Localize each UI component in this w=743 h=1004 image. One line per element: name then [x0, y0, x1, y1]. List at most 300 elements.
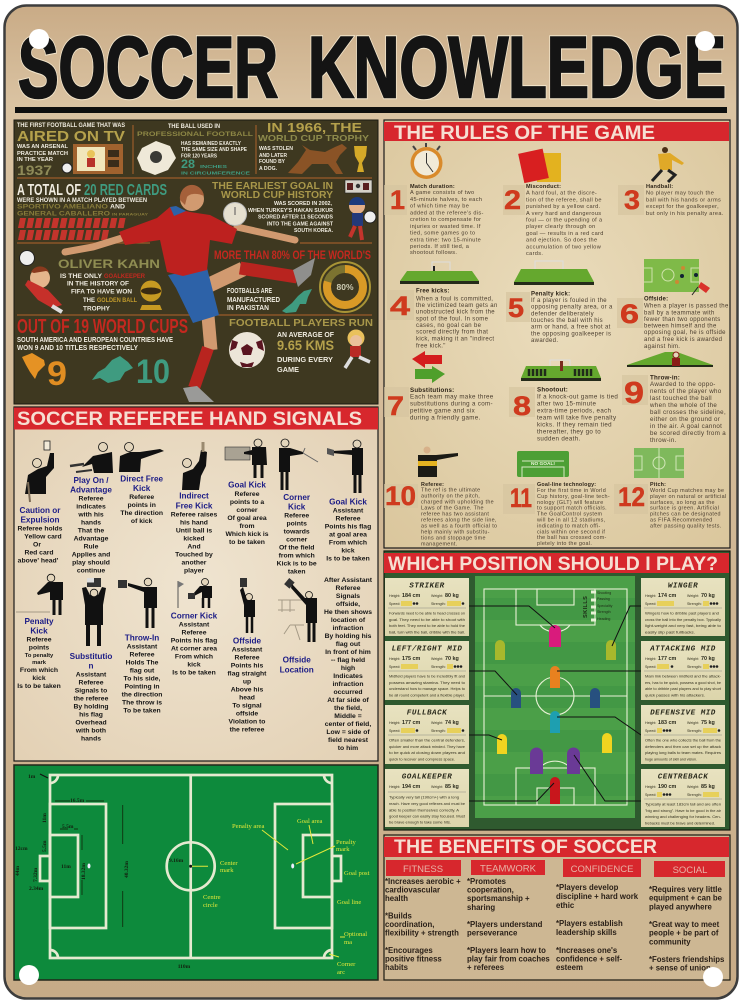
rule 9: throw-in: Awarded to the oppo- [650, 381, 716, 388]
rule 9: throw-in: throw-in. [650, 437, 677, 444]
signal: penalty kick: To penalty [25, 653, 54, 659]
rule 9: throw-in: in the air. A goal cannot [650, 423, 722, 430]
column: social: equipment + can be [649, 894, 723, 903]
fact: players run: AN AVERAGE OF [277, 330, 334, 339]
card: striker: STRIKER [409, 582, 445, 590]
fact: 1966 trophy: IN 1966, THE [267, 120, 362, 135]
rule 7: substitutions [387, 351, 494, 422]
card: fullback: Height: [389, 721, 400, 725]
rule 1: match duration: extra time: two 15-minute [410, 237, 481, 243]
signal: substitution: with both [75, 727, 106, 734]
fact: players run: FOOTBALL PLAYERS RUN [229, 317, 373, 329]
signal: direct free kick [119, 442, 164, 525]
card: fullback: Speed: [389, 729, 400, 733]
signal: assistant goal kick: Points his flag [325, 523, 371, 530]
card: winger: cross the ball into the penalty box. Typically [645, 618, 721, 622]
signal: assistant corner kick [171, 578, 218, 677]
fact: red cards: WERE SHOWN IN A MATCH PLAYED BETWEEN [17, 197, 147, 204]
signal: play on: Applies and [72, 552, 110, 559]
fact: earliest goal: INTO THE GAME AGAINST [267, 222, 334, 228]
card: defensive mid: 75 kg [701, 720, 715, 726]
card: left/right mid: Midfield players have to be incredibly fit and [389, 674, 465, 678]
text: offside location explanation: flag out [336, 641, 361, 648]
signal: throw-in: Referee [130, 651, 155, 658]
signal: assistant corner kick: Points his flag [171, 638, 217, 645]
rule 4: free kicks [390, 262, 498, 350]
legend: skills: SKILLS [583, 596, 589, 618]
rule 6: offside [620, 259, 729, 350]
text: offside location explanation: He then shows [324, 609, 372, 616]
signal: throw-in [118, 578, 162, 714]
labels: black dimensions: 11m [42, 813, 48, 823]
rule 10: referee: The ref is the ultimate [421, 488, 480, 494]
card: attacking mid: Main link between midfield and the attack- [645, 674, 722, 678]
card: attacking mid: Speed: [645, 665, 656, 669]
fact: 80 percent: FOOTBALLS ARE [227, 288, 272, 295]
rule 10: referee: tions and stoppage time [421, 536, 486, 542]
signal: play on: Rule [84, 544, 99, 551]
signal: substitution: Overhead [75, 719, 107, 726]
rule 5: penalty kick: the opposing goalkeeper is [531, 331, 611, 337]
rule 4: free kicks: Free kicks: [416, 289, 450, 295]
card: winger: Strength: [687, 602, 702, 606]
rule 6: offside: fewer than two opponents [644, 317, 721, 323]
signal: assistant goal kick: kick [341, 547, 355, 554]
rule 8: shootout: team will take five penalty [537, 415, 617, 422]
signal: assistant corner kick: At corner area [171, 646, 217, 653]
signal: caution or expulsion: Referee holds [18, 526, 62, 533]
labels: black dimensions: 5.5m [42, 840, 48, 852]
signal: throw-in: flag out [130, 667, 155, 674]
fact: ball: FOR 120 YEARS [181, 154, 217, 160]
card: left/right mid: Height: [389, 657, 400, 661]
signal: indirect free kick: And [187, 543, 201, 550]
signal: throw-in: the direction [122, 691, 162, 698]
fact: red cards: A TOTAL OF [17, 182, 81, 199]
signal: penalty kick: kick [32, 675, 46, 682]
signal: direct free kick: of kick [131, 518, 153, 525]
fact: earliest goal: THE EARLIEST GOAL IN [212, 181, 333, 192]
labels: yellow names and arrows: Goal area [297, 818, 323, 825]
rule 7: substitutions: petitive game and six [410, 408, 476, 415]
labels: black dimensions [15, 774, 191, 970]
rule 4: free kicks: scored directly from that [416, 330, 488, 336]
fact: aired on tv [17, 122, 125, 178]
fact: world cups: WON 9 AND 10 TITLES RESPECTIVELY [17, 345, 138, 352]
signal: offside: Offside [233, 637, 262, 646]
signal: penalty kick: Referee [27, 637, 51, 644]
card: goalkeeper: GOALKEEPER [402, 774, 452, 782]
rule 12: pitch: 12 [618, 482, 645, 512]
legend: skills: Shooting [597, 591, 611, 595]
rule 9: throw-in: nents of the player who [650, 388, 722, 395]
signal: offside location: Location [280, 665, 314, 674]
card: striker: Strength: [431, 602, 446, 606]
legend: skills: Passing [597, 597, 610, 601]
rule 11: goal-line technology: to support match officials. [537, 506, 607, 512]
rule 1: match duration [390, 143, 484, 256]
signal: assistant corner kick: Referee [182, 630, 207, 637]
rule 3: handball: Handball: [646, 184, 673, 190]
column: teamwork: cooperation, [467, 886, 514, 895]
fact: oliver kahn: TROPHY [83, 306, 111, 312]
title: SOCCER [18, 20, 278, 116]
labels: black dimensions: 44m [15, 866, 21, 876]
signal: offside location: Offside [283, 656, 311, 665]
card: defensive mid: defenders and then can set up the attack [645, 745, 721, 749]
card: striker [385, 578, 469, 636]
text: offside location explanation: center of field, [325, 721, 371, 728]
column: teamwork: perseverance [467, 929, 518, 938]
fact: 1966 trophy: WAS STOLEN [259, 146, 293, 152]
signal: offside: Referee [235, 655, 260, 662]
rule 4: free kicks: cases, no goal can be [416, 323, 482, 329]
rule 10: referee: referee has two assistant [421, 512, 489, 518]
rule 7: substitutions: substitutions during a com- [410, 401, 493, 408]
signal: penalty kick: Is to be taken [17, 683, 61, 690]
card: left/right mid: LEFT/RIGHT MID [392, 646, 462, 654]
labels: yellow names and arrows: arc [337, 969, 345, 976]
text: offside location explanation: Middle = [334, 713, 362, 720]
fact: ball: THE SAME SIZE AND SHAPE [181, 147, 247, 153]
signal: substitution: By holding [73, 703, 109, 710]
rule 12: pitch [618, 448, 726, 529]
fact: red cards: AND [110, 204, 125, 210]
rule 1: match duration: cretion to compensate for [410, 217, 481, 223]
icon: dog [288, 144, 347, 174]
rule 6: offside: against him. [644, 344, 680, 350]
signal: assistant goal kick: From which [329, 539, 367, 546]
card: attacking mid: 70 kg [701, 656, 715, 662]
card: fullback: quick to recover and compress space. [389, 758, 455, 762]
rule 2: misconduct [504, 149, 604, 257]
labels: black dimensions: 18.32m [81, 863, 87, 880]
rule 1: match duration: 45-minute halves, to each [410, 197, 482, 203]
rule 11: goal-line technology: 11 [510, 483, 532, 513]
rule 1: match duration: added at the referee's dis- [410, 210, 484, 216]
card: centreback: 85 kg [701, 784, 715, 790]
card: centreback: 190 cm [658, 784, 676, 790]
chart: 80 percent donut [320, 262, 370, 312]
column: fitness: *Encourages [385, 946, 433, 955]
column: fitness: *Increases aerobic + [385, 877, 461, 886]
signal: corner kick: Kick is to be [277, 560, 317, 567]
icon: scoreboard [345, 180, 372, 193]
signal: goal kick: corner [236, 507, 258, 514]
rule 9: throw-in: Throw-in: [650, 374, 680, 381]
card: centreback [641, 769, 725, 827]
signal: offside: offside [236, 711, 258, 718]
card: attacking mid: able to dribble past players and to play short [645, 687, 721, 691]
fact: oliver kahn: FIFA TO HAVE WON [71, 288, 132, 296]
connector lines [469, 606, 641, 801]
rule 8: shootout [513, 360, 618, 443]
signal: penalty kick: From which [20, 667, 58, 674]
rule 7: substitutions: Substitutions: [410, 387, 454, 394]
rule 7: substitutions: during a friendly game. [410, 415, 481, 422]
rule 5: penalty kick: 5 [508, 293, 524, 323]
heading: which position: WHICH POSITION SHOULD I PLAY? [388, 554, 718, 575]
signal: offside [228, 578, 267, 734]
fact: 1966 trophy: WORLD CUP TROPHY [258, 133, 370, 143]
signal: goal kick: Goal Kick [228, 481, 266, 490]
column: confidence: discipline + hard work [556, 892, 639, 901]
rule 6: offside: and a free kick is awarded [644, 337, 722, 343]
card: attacking mid: 177 cm [658, 656, 676, 662]
labels: black dimensions: 40.32m [124, 861, 130, 878]
card: striker: Height: [389, 594, 400, 598]
fact: 80 percent [214, 248, 371, 313]
rule 11: goal-line technology: The GoalControl system [537, 512, 603, 518]
signal: offside: flag straight [228, 671, 267, 678]
signal: goal kick: points to a [230, 499, 264, 506]
column: social: *Great way to meet [649, 920, 720, 929]
fact: red cards: 20 RED CARDS [84, 182, 167, 199]
column: fitness [385, 860, 461, 972]
signal: assistant corner kick: From which [175, 654, 213, 661]
card: centreback: "big and strong". Have to be good in the air [645, 809, 722, 813]
signal: corner kick: Corner [283, 493, 311, 502]
rule 9: throw-in: last touched the ball [650, 395, 712, 402]
signal: throw-in: Assistant [127, 643, 157, 650]
card: left/right mid: Speed: [389, 665, 400, 669]
signal: caution or expulsion: above' head' [18, 558, 59, 565]
card: left/right mid: Strength: [431, 665, 446, 669]
signal: offside: the referee [230, 727, 265, 734]
heading: rules of the game [384, 122, 729, 144]
column: teamwork: TEAMWORK [480, 864, 537, 874]
fact: aired on tv: 1937 [17, 162, 52, 178]
card: goalkeeper: reach. Have very good reflexes and must be [389, 802, 465, 806]
column: confidence: ethic [556, 901, 575, 910]
fact: red cards: GENERAL CABALLERO [17, 210, 110, 218]
rule 2: misconduct: 2 [504, 185, 521, 215]
fact: ball: IN CIRCUMFERENCE [181, 170, 250, 176]
labels: black dimensions: 1m [28, 774, 36, 780]
signal: play on: with his [77, 512, 104, 519]
icon: soccer ball [229, 332, 265, 368]
fact: earliest goal: WORLD CUP HISTORY [221, 190, 333, 201]
fact: oliver kahn: GOALKEEPER [104, 273, 145, 280]
fact: red cards [17, 182, 167, 240]
fact: aired on tv: AIRED ON TV [17, 128, 125, 145]
text: offside location explanation: By holding his [325, 633, 372, 640]
signal: goal kick [225, 439, 269, 546]
labels: yellow names and arrows: mark [220, 867, 234, 874]
fact: aired on tv: PRACTICE MATCH [17, 151, 68, 157]
signal: throw-in: Pointing in [124, 683, 160, 690]
rule 6: offside: 6 [620, 299, 639, 329]
text: offside location explanation: the field, [334, 705, 362, 712]
signal: corner kick: points [287, 520, 307, 527]
card: winger: light-weight and very fast, being able to [645, 624, 721, 628]
card: winger: Height: [645, 594, 656, 598]
panel: which position should I play [384, 551, 730, 830]
signal: caution or expulsion: Caution or [20, 506, 61, 515]
card: striker: Forwards need to be able to head crosses on [389, 612, 465, 616]
legend: skills: Speciality [597, 604, 613, 608]
rule 5: penalty kick: touches the ball with his [531, 318, 603, 324]
labels: black dimensions: 12cm [15, 846, 28, 852]
text: offside location explanation: Low = side of [326, 729, 370, 736]
labels: black dimensions: 11m [61, 864, 71, 870]
card: winger: Wingers how to dribble past players and [645, 612, 719, 616]
card: defensive mid: playing long balls to team mates. Requires [645, 751, 721, 755]
signal: assistant goal kick: Referee [336, 515, 361, 522]
card: attacking mid: ATTACKING MID [649, 646, 716, 654]
signal: indirect free kick: Indirect [179, 492, 209, 501]
signal: direct free kick: Referee [129, 494, 154, 501]
illustration: kicking player [65, 185, 315, 402]
card: centreback: Strength: [687, 793, 702, 797]
card: fullback: FULLBACK [407, 710, 448, 718]
column: confidence: *Players establish [556, 919, 623, 928]
card: attacking mid [641, 641, 725, 700]
icon: pakistan map [282, 289, 312, 313]
card: fullback: 74 kg [445, 720, 459, 726]
rule 11: goal-line technology: NO GOAL! [531, 461, 555, 467]
rule 2: misconduct: tion of the referee, shall be [526, 197, 602, 203]
signal: caution or expulsion: Yellow card [24, 534, 62, 541]
signal: substitution: Referee [79, 679, 104, 686]
fact: world cups: SOUTH AMERICA AND EUROPEAN COUNTRIES HAVE [17, 337, 173, 344]
rule 10: referee: help mainly with substitu- [421, 530, 490, 536]
fact: earliest goal: WHEN TURKEY'S HAKAN SUKUR [248, 208, 333, 214]
rule 2: misconduct: A hard foul, at the discre- [526, 191, 597, 197]
rule 8: shootout: sudden death. [537, 436, 581, 443]
rule 8: shootout: 8 [513, 391, 531, 421]
column: confidence: *Players develop [556, 883, 618, 892]
icon: golden ball [140, 280, 162, 302]
column: fitness: cardiovascular [385, 886, 440, 895]
fact: 1966 trophy: A DOG. [259, 166, 277, 172]
labels: yellow names and arrows: Corner [337, 961, 356, 968]
signal: penalty kick: mark [32, 660, 47, 666]
rule 10: referee: Referee: [421, 482, 444, 488]
rule 4: free kicks: unobstructed kick from the [416, 310, 495, 316]
labels: yellow names and arrows: Penalty [336, 839, 356, 846]
card: winger: 174 cm [658, 593, 676, 599]
rule 6: offside: ball by a teammate with [644, 310, 715, 316]
signal: substitution: hands [81, 735, 101, 742]
card: defensive mid: Strength: [687, 729, 702, 733]
signal: goal kick: from [239, 523, 255, 530]
card: left/right mid: 70 kg [445, 656, 459, 662]
labels: yellow names and arrows: mark [336, 846, 350, 853]
card: defensive mid: Often the one who collects the ball from the [645, 738, 721, 742]
card: goalkeeper: Height: [389, 785, 400, 789]
rule 12: pitch: after passing quality tests. [650, 523, 722, 529]
rule 12: pitch: surface is green. Artificial [650, 506, 719, 512]
signal: direct free kick: The direction [120, 510, 163, 517]
rule 8: shootout: after two 15-minute [537, 401, 596, 408]
icon: running kid [348, 330, 364, 346]
column: fitness: habits [385, 963, 409, 972]
signal: play on: Referee [79, 496, 103, 503]
labels: black dimensions: 110m [178, 964, 191, 970]
labels: yellow names and arrows: circle [203, 902, 218, 909]
column: social: played anywhere [649, 902, 712, 911]
rule 1: match duration: Match duration: [410, 184, 455, 190]
signal: indirect free kick: Touched by [175, 551, 213, 558]
rule 11: goal-line technology: cials within one second if [537, 529, 605, 535]
signal: corner kick: from which [279, 552, 315, 559]
card: striker: ball, turn with the ball, dribble with the ball. [389, 630, 465, 634]
rule 4: free kicks: 4 [390, 291, 410, 321]
card: striker: both feet. They need to be able to hold the [389, 624, 465, 628]
rule 5: penalty kick: opposing penalty area, or a [531, 305, 613, 311]
icon: south america map [22, 353, 45, 379]
column: confidence: confidence + self- [556, 955, 622, 964]
column: teamwork: + referees [467, 963, 505, 972]
fact: ball [137, 123, 253, 176]
card: left/right mid: 175 cm [402, 656, 420, 662]
signal: throw-in: To his side, [124, 675, 161, 682]
card: attacking mid: Strength: [687, 665, 702, 669]
signal: penalty kick: points [29, 645, 49, 652]
signal: substitution [70, 578, 112, 742]
card: left/right mid: understand how to manage space. Helps to [389, 687, 465, 691]
fact: world cups: 9 [47, 355, 67, 393]
fact: aired on tv: WAS AN ARSENAL [17, 144, 68, 150]
fact: ball: HAS REMAINED EXACTLY [181, 141, 241, 147]
rule 12: pitch: as FIFA Recommended [650, 518, 713, 524]
card: defensive mid: DEFENSIVE MID [650, 710, 716, 718]
card: left/right mid: possess amazing stamina. They need to [389, 681, 465, 685]
column: confidence: CONFIDENCE [571, 864, 633, 875]
rule 11: goal-line technology: indicating to match offi- [537, 523, 601, 529]
text: offside location explanation: to him [338, 745, 358, 752]
rule 8: shootout: extra-time periods, each [537, 408, 612, 415]
signal: substitution: Substitutio [70, 652, 112, 661]
rule 5: penalty kick: awarded. [531, 338, 558, 344]
fact: world cups [17, 316, 188, 393]
card: striker: Weight: [431, 594, 443, 598]
signal: goal kick: Of goal area [227, 515, 267, 522]
signal: indirect free kick [171, 442, 217, 574]
rule 4: free kicks: spot of the foul. In some [416, 316, 489, 322]
signal: assistant goal kick [325, 440, 371, 562]
signal: goal kick: to be taken [229, 539, 265, 546]
rule 3: handball [624, 147, 724, 217]
signal: assistant goal kick: Goal Kick [329, 497, 367, 506]
rule 1: match duration: shootout follows. [410, 250, 457, 256]
rule 9: throw-in: 9 [624, 375, 644, 410]
rule 9: throw-in: when the whole of the [649, 402, 717, 409]
signal: play on [70, 442, 113, 575]
diagram: pitch lines [40, 775, 341, 958]
rule 9: throw-in: be scored directly from a [650, 430, 726, 437]
legend: skills: Heading [597, 617, 610, 621]
signal: indirect free kick: Free Kick [176, 501, 213, 510]
card: winger: 70 kg [701, 593, 715, 599]
fact: world cups: 10 [136, 353, 170, 391]
rule 11: goal-line technology [510, 451, 610, 547]
signal: assistant corner kick: Is to be taken [172, 670, 216, 677]
fact: oliver kahn: GOLDEN BALL [97, 297, 137, 304]
fact: 80 percent: MANUFACTURED [227, 297, 280, 304]
column: social: + sense of union [649, 964, 711, 972]
labels: black dimensions: 5.5m [62, 824, 74, 830]
card: centreback: Speed: [645, 793, 656, 797]
card: striker: goal. They need to be able to shoot with [389, 618, 465, 622]
card: attacking mid: Height: [645, 657, 656, 661]
card: winger: WINGER [668, 582, 698, 590]
legend: skills [583, 591, 613, 621]
rule 4: free kicks: When a foul is committed, [416, 296, 493, 302]
signal: assistant goal kick: at goal area [329, 531, 367, 538]
signal: throw-in: To be taken [123, 707, 161, 714]
